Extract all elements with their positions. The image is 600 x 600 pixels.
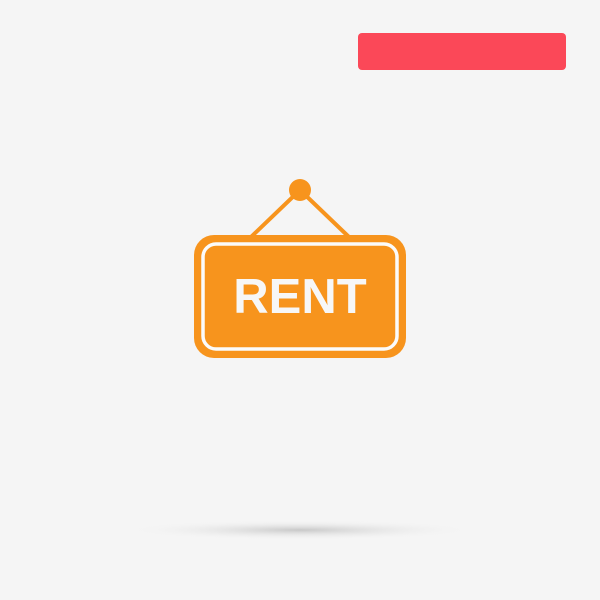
red banner bar: [358, 33, 566, 70]
hanging string: [250, 179, 350, 238]
sign text: RENT: [233, 270, 367, 324]
sign board: [194, 235, 406, 358]
shadow: [125, 520, 475, 540]
